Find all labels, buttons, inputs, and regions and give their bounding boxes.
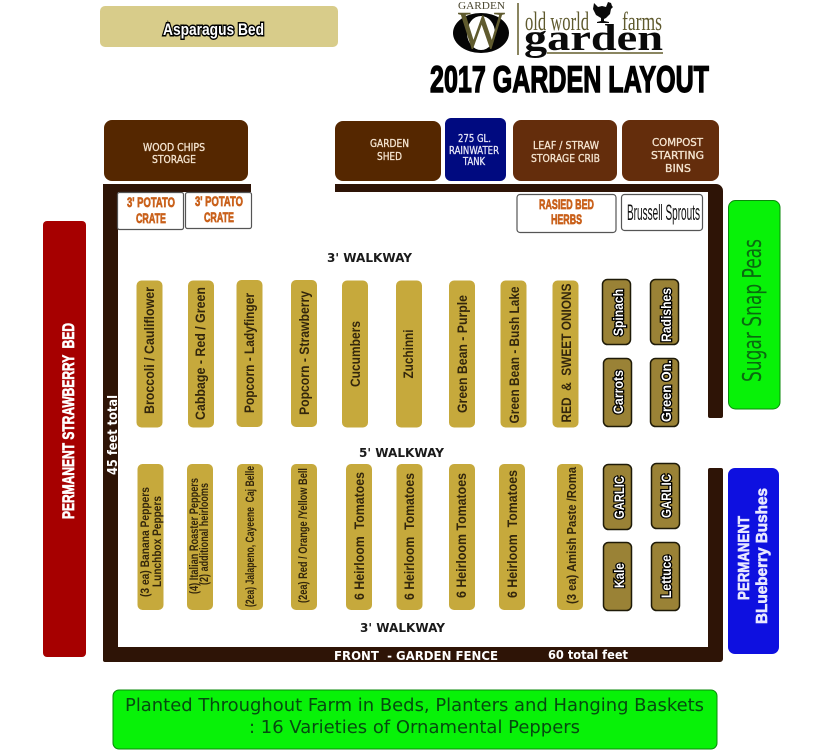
raised bed herbs: HERBS <box>551 211 582 227</box>
small bed: garlic 2: GARLIC <box>658 474 674 518</box>
small bed: spinach: Spinach <box>610 289 626 336</box>
walkway label bottom: 3' WALKWAY <box>360 620 446 635</box>
panel: compost starting bins <box>622 120 719 181</box>
walkway label top: 3' WALKWAY <box>327 250 413 265</box>
panel: wood chips storage <box>104 120 248 181</box>
panel: garden shed <box>335 121 441 181</box>
panel: ornamental peppers note: Planted Throughout Farm in Beds, Planters and Hanging Baskets <box>125 695 704 716</box>
bed: heirloom tomatoes 4 <box>499 464 525 610</box>
bed: green bean purple <box>449 280 475 428</box>
small bed: garlic 1: GARLIC <box>611 476 627 519</box>
small bed: green onions <box>650 358 678 426</box>
small bed: carrots <box>604 358 632 426</box>
potato crate 1 <box>118 192 184 230</box>
bed: zuchinni: Zuchinni <box>400 330 416 378</box>
bed: broccoli cauliflower: Broccoli / Cauliflower <box>141 287 157 414</box>
logo: old world garden farms: W <box>458 0 505 60</box>
bed: heirloom tomatoes 4: 6 Heirloom Tomatoes <box>504 470 520 598</box>
small bed: green onions: Green On. <box>658 360 674 422</box>
small bed: radishes <box>650 280 678 344</box>
panel: ornamental peppers note <box>113 690 717 749</box>
bed: cabbage <box>188 280 214 428</box>
panel: rainwater tank: RAINWATER <box>449 145 499 157</box>
fence label: 60 total feet: 60 total feet <box>548 647 628 662</box>
bed: red orange yellow bell <box>291 464 317 610</box>
logo: old world garden farms <box>453 0 664 60</box>
bed: heirloom tomatoes 3: 6 Heirloom Tomatoes <box>453 473 469 598</box>
panel: permanent blueberry bushes: PERMANENT <box>736 516 753 600</box>
logo: old world garden farms: old world <box>525 7 589 36</box>
bed: green bean bush lake <box>500 280 526 428</box>
bed: banana and lunchbox peppers: Lunchbox Peppers <box>150 496 164 587</box>
panel: permanent blueberry bushes <box>728 468 779 654</box>
panel: wood chips storage: WOOD CHIPS <box>143 142 205 154</box>
small bed: carrots: Carrots <box>610 370 626 414</box>
small bed: lettuce: Lettuce <box>658 555 674 598</box>
panel: wood chips storage: STORAGE <box>152 154 196 166</box>
panel: sugar snap peas <box>728 200 780 409</box>
panel: rainwater tank: TANK <box>462 156 486 168</box>
panel: asparagus bed: Asparagus Bed <box>163 20 264 39</box>
bed: red orange yellow bell: (2ea) Red / Orange /Yellow Bell <box>296 468 310 603</box>
panel: leaf and straw storage crib <box>513 120 617 181</box>
panel: asparagus bed <box>100 6 338 47</box>
bed: heirloom tomatoes 2 <box>396 464 422 610</box>
bed: cucumbers <box>342 280 368 428</box>
bed: jalapeno cayenne: (2ea) Jalapeno, Cayeene Caj Belle <box>243 466 257 607</box>
bed: italian roaster peppers: (4) Italian Roaster Peppers <box>187 478 201 594</box>
panel: garden shed: GARDEN <box>370 138 409 150</box>
small bed: lettuce <box>652 542 680 610</box>
potato crate 2: CRATE <box>204 209 234 225</box>
bed: heirloom tomatoes 1: 6 Heirloom Tomatoes <box>351 472 367 600</box>
bed: jalapeno cayenne <box>237 464 263 610</box>
raised bed herbs <box>517 194 616 232</box>
logo: old world garden farms: GARDEN <box>458 0 505 12</box>
fence label: front garden fence: FRONT - GARDEN FENCE <box>334 648 498 663</box>
icon: chicken <box>593 2 613 23</box>
bed: red and sweet onions: RED & SWEET ONIONS <box>558 284 574 422</box>
bed: cucumbers: Cucumbers <box>347 321 363 387</box>
small bed: kale: Kale <box>611 563 627 588</box>
panel: garden shed: SHED <box>377 151 402 163</box>
bed: italian roaster peppers <box>187 464 213 610</box>
panel: compost starting bins: COMPOST <box>652 137 704 149</box>
small bed: kale <box>604 542 632 610</box>
bed: green bean bush lake: Green Bean - Bush Lake <box>506 286 522 424</box>
bed: popcorn ladyfinger <box>236 280 262 427</box>
logo: old world garden farms: garden <box>524 18 664 59</box>
title: 2017 GARDEN LAYOUT <box>430 59 709 100</box>
brussell sprouts bed <box>622 194 702 230</box>
bed: red and sweet onions <box>552 280 578 428</box>
panel: ornamental peppers note: : 16 Varieties of Ornamental Peppers <box>249 717 580 738</box>
bed: italian roaster peppers: (2) additional heirlooms <box>197 483 211 585</box>
bed: amish paste roma <box>557 464 583 610</box>
panel: compost starting bins: BINS <box>665 163 691 175</box>
panel: sugar snap peas: Sugar Snap Peas <box>738 239 768 382</box>
small bed: garlic 1 <box>604 464 632 530</box>
potato crate 1: CRATE <box>136 210 166 226</box>
bed: popcorn strawberry <box>291 280 317 427</box>
small bed: spinach <box>602 280 630 344</box>
potato crate 2: 3' POTATO <box>195 193 243 209</box>
bed: banana and lunchbox peppers <box>138 464 164 610</box>
bed: zuchinni <box>396 280 422 428</box>
bed: banana and lunchbox peppers: (3 ea) Banana Peppers <box>138 487 152 597</box>
walkway label middle: 5' WALKWAY <box>359 445 445 460</box>
bed: green bean purple: Green Bean - Purple <box>454 295 470 413</box>
panel: permanent strawberry bed <box>43 221 86 657</box>
bed: heirloom tomatoes 1 <box>346 464 372 610</box>
panel: compost starting bins: STARTING <box>651 150 704 162</box>
logo: old world garden farms: farms <box>622 7 662 36</box>
panel: rainwater tank <box>445 118 506 181</box>
text: Brussell Sprouts <box>627 200 700 225</box>
small bed: radishes: Radishes <box>658 288 674 342</box>
panel: rainwater tank: 275 GL. <box>458 133 491 145</box>
panel: leaf and straw storage crib: LEAF / STRAW <box>533 140 600 152</box>
bed: popcorn strawberry: Popcorn - Strawberry <box>296 291 312 415</box>
bed: heirloom tomatoes 2: 6 Heirloom Tomatoes <box>401 473 417 600</box>
panel: permanent blueberry bushes: BLueberry Bushes <box>754 488 771 624</box>
potato crate 1: 3' POTATO <box>127 194 175 210</box>
garden fence <box>103 184 723 663</box>
potato crate 2 <box>186 192 252 228</box>
raised bed herbs: RASIED BED <box>539 196 594 212</box>
fence label: 45 feet total: 45 feet total <box>106 395 121 475</box>
bed: popcorn ladyfinger: Popcorn - Ladyfinger <box>241 293 257 413</box>
small bed: garlic 2 <box>652 464 680 528</box>
panel: leaf and straw storage crib: STORAGE CRIB <box>531 153 600 165</box>
bed: heirloom tomatoes 3 <box>449 464 475 610</box>
bed: cabbage: Cabbage - Red / Green <box>192 287 208 420</box>
bed: broccoli cauliflower <box>136 280 162 428</box>
panel: permanent strawberry bed: PERMANENT STRAWBERRY BED <box>59 323 78 519</box>
bed: amish paste roma: (3 ea) Amish Paste /Roma <box>564 466 579 604</box>
